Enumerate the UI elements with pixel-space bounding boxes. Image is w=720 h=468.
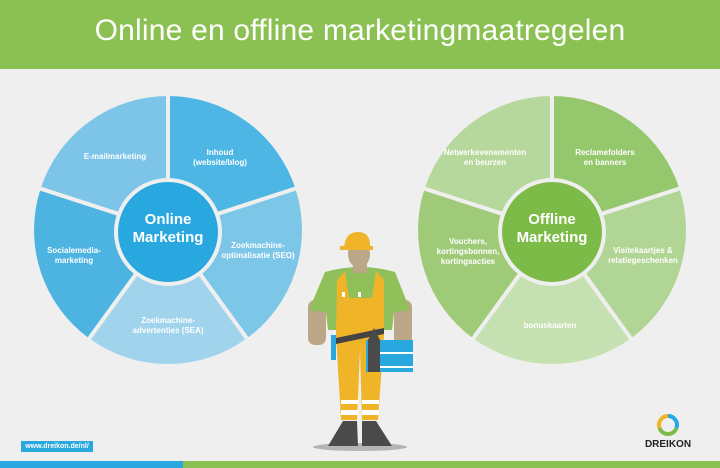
center label: online: Online xyxy=(145,211,191,228)
text: en banners xyxy=(584,158,626,167)
header band xyxy=(0,0,720,69)
text: Zoekmachine- xyxy=(141,316,195,325)
text: marketing xyxy=(55,256,93,265)
toolbox xyxy=(366,340,413,372)
text: kortingsbonnen, xyxy=(437,247,499,256)
text: Vouchers, xyxy=(449,237,487,246)
text: Inhoud xyxy=(207,148,233,157)
center label: online xyxy=(133,211,203,246)
pie: online xyxy=(32,94,304,366)
url badge xyxy=(21,441,93,452)
labels: online: E-mailmarketing xyxy=(84,152,146,161)
text: kortingsacties xyxy=(441,257,495,266)
arms xyxy=(308,300,326,345)
text: (website/blog) xyxy=(193,158,247,167)
text: advertenties (SEA) xyxy=(132,326,204,335)
text: Socialemedia- xyxy=(47,246,101,255)
text: Visitekaartjes & xyxy=(613,246,673,255)
logo icon xyxy=(659,416,677,434)
center label: offline: Offline xyxy=(528,211,576,228)
text: Zoekmachine- xyxy=(231,241,285,250)
center label: online: Marketing xyxy=(133,229,203,246)
pie: offline xyxy=(416,94,688,366)
text: Reclamefolders xyxy=(575,148,635,157)
worker illustration xyxy=(308,232,413,451)
shirt xyxy=(309,267,410,330)
logo text: DREIKON xyxy=(645,439,691,450)
labels: offline xyxy=(444,148,526,167)
overalls xyxy=(336,271,384,420)
bottom bar xyxy=(0,461,720,468)
url badge: www.dreikon.de/nl/ xyxy=(25,443,89,450)
text: optimalisatie (SEO) xyxy=(221,251,295,260)
center label: offline: Marketing xyxy=(517,229,587,246)
labels: offline: Netwerkevenementen xyxy=(444,148,526,157)
title: Online en offline marketingmaatregelen xyxy=(95,14,625,47)
neck/head xyxy=(353,255,367,273)
labels: offline: en beurzen xyxy=(464,158,506,167)
center label: offline xyxy=(517,211,587,246)
text: relatiegeschenken xyxy=(608,256,678,265)
text: bonuskaarten xyxy=(524,321,576,330)
